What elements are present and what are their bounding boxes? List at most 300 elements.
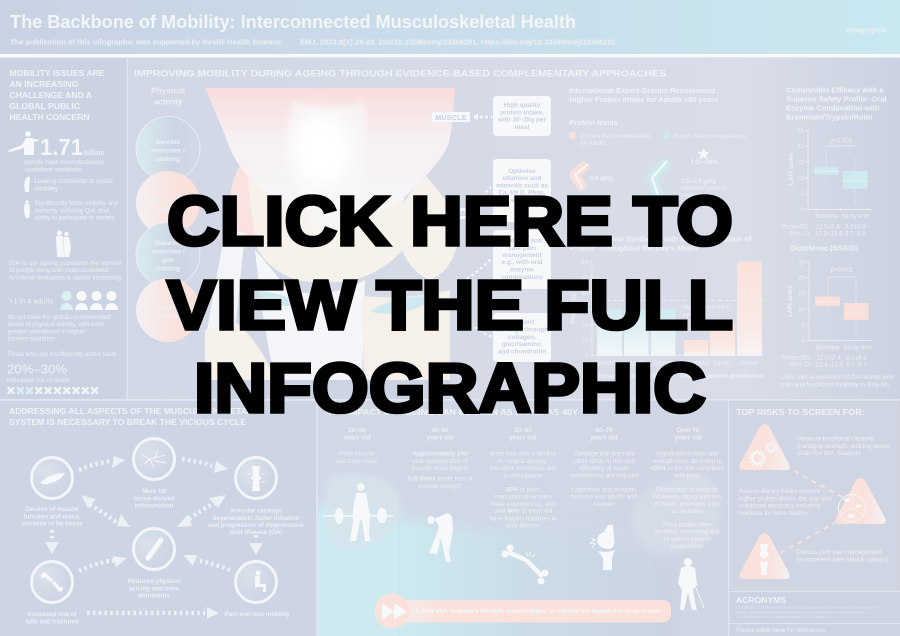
icon: wheelchair figure bbox=[24, 176, 30, 192]
column: over 70: <50% in the 80s compared bbox=[650, 465, 724, 472]
column: 40-50: years old bbox=[426, 434, 454, 442]
overlay: click here text: VIEW THE FULL bbox=[167, 266, 733, 344]
box plot: diclofenac: 8.7–9.7 bbox=[846, 362, 867, 368]
legend: expert: Expert Recommendations bbox=[674, 133, 745, 140]
node: fractures bbox=[32, 562, 72, 602]
bars: equal distribution bbox=[597, 309, 676, 356]
column: 40-50: muscle mass begins bbox=[412, 465, 468, 472]
box: protein: meal bbox=[515, 124, 530, 131]
column: 20-30 bbox=[323, 427, 393, 541]
label: muscle bbox=[432, 112, 478, 122]
label: current intake: 0.8 g/kg bbox=[590, 175, 613, 182]
circle: power bbox=[136, 278, 200, 342]
label: cartilage: joint disease (OA) bbox=[229, 529, 282, 536]
y axis labels: 50 bbox=[581, 274, 589, 282]
column: 20-30: and bone mass bbox=[336, 458, 378, 465]
circle: power: exercises bbox=[153, 314, 183, 320]
node: joint bbox=[236, 458, 276, 498]
column: over 70: years old bbox=[674, 434, 702, 442]
box plot: enzyme combination: Mean±SD bbox=[781, 224, 809, 230]
column: 60-70: mechanisms are reduced bbox=[569, 472, 639, 480]
box plot: enzyme combination: LAFI score bbox=[788, 152, 795, 185]
box: vitamins: Optimise bbox=[508, 168, 536, 175]
box: protein: with 20–35g per bbox=[497, 117, 546, 124]
text: limits mobility: ability to participate in society bbox=[34, 214, 116, 222]
text: physical activity levels: do not meet the global recommended bbox=[8, 314, 111, 321]
box plot: diclofenac bbox=[782, 259, 872, 368]
divider bbox=[730, 623, 900, 624]
box plot: diclofenac: 25 bbox=[798, 259, 806, 266]
text: ageing population: of people living with musculoskeletal bbox=[9, 267, 109, 274]
infographic tag: Infographic bbox=[846, 26, 887, 34]
box: pain management: enzyme bbox=[510, 266, 534, 274]
stat: 1.71 billion: billion bbox=[84, 150, 105, 157]
box: pain management: combinations bbox=[501, 274, 543, 281]
column: over 70: increases, along with risk bbox=[652, 494, 722, 501]
meniscus bbox=[257, 291, 291, 306]
box: pain management: e.g., with oral bbox=[502, 259, 543, 266]
box: vitamins: vitamins and bbox=[502, 175, 542, 182]
circle: aerobic bbox=[136, 116, 200, 180]
heading: physical activity: Physical bbox=[151, 86, 185, 96]
label: equal: Equal protein distribution bbox=[597, 373, 673, 380]
text: functional capacity: Measure functional capacity bbox=[797, 436, 875, 442]
label: expert intake: 1.0–1.2 g/kg bbox=[681, 178, 716, 185]
y axis labels: 30 bbox=[581, 306, 589, 314]
panel: nutrition and joint boxes bbox=[432, 96, 551, 362]
note: LAFI: pain and functional disability in daily life bbox=[781, 381, 890, 388]
icon: star increase: 25–50% bbox=[695, 159, 718, 166]
x axis labels: Breakfast bbox=[683, 360, 709, 367]
panel: protein synthesis bar chart bbox=[569, 234, 765, 380]
panel: mobility issues bbox=[0, 58, 128, 399]
medial tendon bbox=[255, 250, 310, 380]
text: limits mobility: dexterity reducing QoL and bbox=[34, 207, 109, 214]
node: muscle decline bbox=[32, 458, 72, 498]
box: pain management bbox=[493, 230, 551, 289]
y axis labels: 20 bbox=[581, 322, 589, 329]
column: over 70 bbox=[650, 427, 724, 610]
text: physical activity levels: income countries bbox=[8, 336, 55, 343]
axes bbox=[589, 262, 763, 356]
stat: 1.71 billion: 1.71 bbox=[40, 134, 83, 160]
box plot: enzyme combination: 12.3–12.9 bbox=[815, 230, 843, 238]
box plot: enzyme combination: 9.1±3.9 bbox=[845, 224, 866, 230]
label: reduced activity: Reduced physical bbox=[128, 578, 181, 585]
knee anatomy illustration bbox=[205, 88, 459, 380]
icon: plate triangle bbox=[835, 478, 886, 524]
label: muscle decline: Decline of muscle bbox=[26, 506, 79, 513]
heading: physical activity: activity bbox=[154, 96, 183, 106]
column: 50-60 bbox=[489, 427, 557, 584]
label: falls: Increased risk of bbox=[27, 611, 78, 618]
column: 40-50 bbox=[407, 427, 473, 562]
text: functional capacity: (handgrip strength, walking speed, bbox=[797, 443, 892, 450]
box: pain management: Effective and bbox=[502, 238, 542, 244]
femur cream bbox=[248, 175, 405, 282]
label: bone bbox=[444, 208, 469, 219]
box plot: enzyme combination: 95% CI bbox=[789, 230, 810, 238]
label: inflammation: tissue derived bbox=[133, 495, 175, 502]
text: ageing population: functional limitations is rapidly increasing bbox=[9, 274, 121, 281]
header band bbox=[0, 0, 900, 58]
icon: gears triangle bbox=[739, 424, 790, 470]
y axis labels: 40 bbox=[581, 290, 589, 298]
text: dietary intake: nutritional adequacy including bbox=[739, 503, 821, 510]
heading: mobility issues: HEALTH CONCERN bbox=[10, 112, 90, 122]
box: vitamins: and Mg bbox=[511, 197, 533, 204]
text: dietary intake: higher protein across the day and bbox=[739, 495, 831, 502]
column: 60-70: efficiency of repair bbox=[579, 465, 629, 472]
box plot: enzyme combination: 20 bbox=[797, 144, 805, 150]
label: cartilage: degeneration: faster initiation bbox=[213, 515, 300, 522]
heading: top risks: TOP RISKS TO SCREEN FOR: bbox=[736, 407, 865, 417]
icon: older couple bbox=[56, 230, 71, 257]
column: 60-70: Cartilage that lines the bbox=[573, 450, 635, 458]
panel: top risks bbox=[730, 401, 900, 636]
heading: improving mobility: IMPROVING MOBILITY DURING AGEING THROUGH EVIDENCE-BASED COMPLEMENTARY APPROACHES bbox=[134, 68, 666, 78]
lavender wave bbox=[318, 401, 496, 523]
panel: complementary approaches background bbox=[128, 58, 900, 399]
box plot: diclofenac: 0 bbox=[802, 338, 806, 345]
column: 50-60: prevalent in females due bbox=[489, 465, 557, 472]
box plot: enzyme combination: 8.7–9.6 bbox=[845, 230, 866, 238]
horizontal divider bbox=[0, 399, 900, 401]
icon: stretching person bbox=[7, 131, 40, 155]
column: over 70: as diabetes bbox=[671, 508, 703, 515]
legend: current bbox=[569, 132, 651, 147]
icon: four people bbox=[60, 291, 118, 310]
circle: resistance: training bbox=[156, 206, 180, 214]
label: reduced activity: activity and bone bbox=[129, 585, 180, 592]
heading: efficacy: Comparable Efficacy with a bbox=[786, 86, 884, 94]
box: protein: protein intake, bbox=[500, 109, 544, 116]
box: pain management: safe pain bbox=[508, 245, 536, 252]
box plot: enzyme combination: 5 bbox=[801, 191, 805, 198]
text: risk of death: increased risk of death bbox=[7, 377, 70, 384]
box: cartilage: and chondroitin bbox=[498, 348, 546, 356]
lateral muscle bbox=[230, 166, 255, 248]
circle: aerobic: Aerobic bbox=[156, 139, 181, 146]
right cream bone bbox=[402, 176, 456, 280]
label: muscle: MUSCLE bbox=[435, 115, 467, 122]
x axis labels: Lunch bbox=[714, 360, 731, 367]
text: acronyms list: QoL: quality of life; SD: standard deviation; Vit D: Vitamin D. bbox=[736, 615, 829, 619]
column: over 70: with peak bbox=[673, 472, 701, 480]
text: references: Please click here for references. bbox=[736, 627, 827, 634]
panel: physical activity circles bbox=[136, 116, 200, 342]
stat: 20-30 percent: 20%–30% bbox=[7, 362, 67, 376]
icon: person with cane bbox=[24, 200, 30, 218]
box plot: diclofenac: 5 bbox=[802, 322, 806, 329]
heading: protein recommendations: Higher Protein Intake for Adults >65 years bbox=[569, 95, 718, 104]
support statement: The publication of this infographic was supported by Nestlé Health Science. bbox=[10, 40, 283, 46]
column: over 70: Over 70 bbox=[677, 427, 700, 434]
heading: mobility issues: GLOBAL PUBLIC bbox=[10, 101, 80, 111]
quadriceps tendon bbox=[289, 100, 366, 233]
label: expert intake: intake for bbox=[681, 192, 706, 199]
box plot: diclofenac: LAFI score bbox=[787, 284, 794, 317]
quadriceps bbox=[205, 88, 455, 213]
box: pain management: management bbox=[502, 252, 543, 259]
text: dietary intake: nutrients for bone health) bbox=[739, 510, 808, 517]
icon: knee joint bbox=[590, 525, 615, 570]
label: unequal: Unequal protein distribution bbox=[681, 373, 764, 380]
box plot: diclofenac: 12.7±2.4 bbox=[816, 354, 841, 362]
heading: protein recommendations: International Expert Groups Recommend bbox=[569, 86, 716, 95]
column: 60-70: 60–70 bbox=[595, 427, 613, 434]
column: 40-50: Approximately 1%/ bbox=[412, 450, 468, 458]
y axis labels: 10 bbox=[581, 338, 589, 344]
box: vitamins: Ca, Vit D, Phos. bbox=[498, 190, 546, 196]
bars: unequal distribution bbox=[684, 262, 762, 356]
box plot: diclofenac: 10 bbox=[798, 306, 806, 313]
column: over 70: Food intake often bbox=[663, 522, 711, 528]
lower-right cream bone bbox=[362, 290, 450, 380]
icon: older person with cane bbox=[678, 558, 704, 610]
heading: efficacy: Bromelain/Trypsin/Rutin bbox=[786, 112, 873, 122]
column: 50-60: over 40% of them will bbox=[494, 508, 552, 515]
blob: lifter bbox=[325, 474, 401, 552]
box plot: diclofenac: 15 bbox=[798, 290, 806, 297]
box plot: diclofenac: p<0.001 bbox=[831, 266, 854, 274]
column: 50-60: to menopause bbox=[503, 472, 543, 480]
circle: balance: Balance bbox=[155, 240, 181, 247]
text: acronyms list: Ca: calcium; CI: confidence interval; LAFI: Lequesne Algofunctional Index; Mg: magnesium; bbox=[736, 606, 878, 610]
y axis labels: 60 bbox=[581, 259, 589, 266]
annotation: maximum synthesis: synthesis bbox=[683, 312, 709, 318]
dark band under knee bbox=[205, 380, 450, 399]
box: cartilage: collagen, bbox=[508, 334, 536, 341]
box plot: diclofenac: 95% CI bbox=[790, 362, 811, 368]
node: bone bbox=[134, 528, 174, 570]
box plot: diclofenac: 20 bbox=[798, 275, 806, 282]
box plot: diclofenac: Baseline bbox=[816, 344, 840, 352]
box plot: enzyme combination: 10 bbox=[797, 175, 805, 182]
box plot: enzyme combination: 12.6±2.4 bbox=[816, 224, 840, 230]
text: acronyms list: NSAID: non-steroidal anti-inflammatory drug; OA: osteoarthritis; Phos: Phosphorus; bbox=[736, 610, 865, 614]
column: 40-50: 40–50 bbox=[431, 427, 449, 434]
column: 50-60: Bone loss with a decline bbox=[490, 450, 557, 458]
column: over 70: malnutrition bbox=[671, 543, 704, 550]
box plot: enzyme combination: 0 bbox=[801, 206, 805, 214]
label: inflammation: More fat bbox=[142, 488, 166, 495]
column: 60-70: joints tends to thin and bbox=[572, 458, 636, 465]
circle: resistance bbox=[136, 171, 200, 235]
panel: efficacy box plots bbox=[781, 86, 894, 388]
box: cartilage: glucosamine, bbox=[502, 341, 543, 348]
label: bone: BONE bbox=[446, 211, 467, 218]
label: expert intake: minimum protein bbox=[681, 185, 727, 192]
label: muscle decline: function and mass; bbox=[24, 513, 80, 520]
heading: mobility issues: CHALLENGE AND A bbox=[10, 90, 92, 100]
divider bbox=[730, 591, 900, 592]
panel: right column divider bbox=[728, 401, 730, 636]
column: 60-70: become less elastic and bbox=[571, 494, 638, 501]
column: over 70: strength loss, declining to bbox=[652, 458, 722, 465]
column: 60-70: Ligaments and tendons bbox=[572, 486, 636, 494]
circle: balance bbox=[136, 222, 200, 286]
connectors bbox=[462, 117, 492, 337]
heading: vicious cycle: SYSTEM IS NECESSARY TO BREAK THE VICIOUS CYCLE bbox=[9, 417, 246, 427]
text: leading contributor: disability bbox=[34, 185, 59, 192]
column: 50-60: in mineral density; bbox=[498, 458, 548, 465]
icon: bent figure bbox=[427, 513, 453, 562]
column: over 70: declines, increasing risk bbox=[654, 529, 721, 536]
heading: mobility issues: AN INCREASING bbox=[10, 79, 79, 89]
heading: efficacy: Superior Safety Profile: Oral bbox=[786, 94, 886, 104]
heading: vicious cycle: ADDRESSING ALL ASPECTS OF THE MUSCULOSKELETAL bbox=[9, 406, 252, 416]
box plot: enzyme combination: 15 bbox=[797, 159, 805, 166]
legend: current: Current Recommendation bbox=[580, 133, 651, 140]
text: limits mobility: Significantly limits mobility and bbox=[34, 200, 119, 207]
column: 20-30: 20–30 bbox=[348, 427, 366, 434]
legend: current: for Adults bbox=[580, 140, 606, 147]
circle: balance: training bbox=[156, 266, 180, 272]
icon: joint triangle bbox=[739, 533, 790, 579]
label: falls: falls and fractures bbox=[25, 618, 79, 625]
callout: poor diet: A poor diet, sedentary lifestyle, comorbidities, or injuries will hasten this progression bbox=[415, 608, 660, 615]
heading: protein levels: Protein levels bbox=[569, 118, 618, 127]
panel: impact of ageing bbox=[318, 409, 724, 636]
text: leading contributor: Leading contributor to global bbox=[34, 178, 113, 185]
icon: broken bone bbox=[502, 544, 548, 584]
text: people affected: people have musculoskeletal bbox=[25, 159, 104, 166]
circle: power: Power bbox=[158, 305, 178, 312]
text: ageing population: Due to our ageing population the number bbox=[9, 260, 122, 267]
column: 50-60: years old bbox=[509, 434, 537, 442]
connectors bbox=[780, 471, 846, 553]
label: cartilage: Articular cartilage bbox=[230, 508, 283, 514]
overlay: click here text: CLICK HERE TO bbox=[167, 182, 733, 260]
column: over 70: of calorie-protein bbox=[664, 536, 711, 543]
box: protein: High quality bbox=[504, 102, 541, 109]
stat: 1.71 billion bbox=[40, 134, 105, 160]
column: 50-60: menopausal females bbox=[494, 494, 552, 501]
blob: right bbox=[632, 475, 720, 552]
text: physical activity levels: levels of physical activity, with even bbox=[8, 321, 105, 328]
label: reduced activity: detriments bbox=[138, 592, 170, 600]
column: 50-60: have fragility fractures in bbox=[489, 516, 557, 522]
column: 40-50: muscle strength bbox=[418, 483, 462, 490]
box: cartilage bbox=[493, 313, 551, 362]
label: cartilage: and progression of degenerative bbox=[208, 522, 305, 529]
panel: vicious cycle bbox=[0, 401, 318, 636]
box plot: enzyme combination: 25 bbox=[797, 128, 805, 135]
text: joint pain: (recommend safe natural options) bbox=[796, 556, 889, 563]
column: over 70: Percentage of body fat bbox=[656, 486, 718, 494]
text: insufficiently active: Those who are insufficiently active have bbox=[7, 351, 117, 358]
heading: impact of ageing: THE IMPACT OF AGEING CAN BE SEEN AS EARLY AS 40Y bbox=[327, 407, 578, 417]
circle: aerobic: exercises / bbox=[151, 148, 185, 154]
box: vitamins: minerals such as bbox=[496, 182, 548, 189]
circle: aerobic: walking bbox=[155, 156, 180, 163]
x axis labels: Lunch bbox=[628, 360, 645, 367]
box: cartilage: Support bbox=[510, 319, 535, 326]
heading: efficacy: Enzyme Combination with bbox=[786, 104, 880, 112]
circle: balance: gait bbox=[162, 257, 175, 264]
box: vitamins bbox=[493, 159, 551, 222]
column: over 70: Significant muscle and bbox=[656, 450, 719, 458]
column: 60-70: years old bbox=[590, 434, 618, 442]
x axis labels: Dinner bbox=[740, 360, 758, 367]
box plot: enzyme combination bbox=[781, 128, 871, 238]
column: over 70: of health problems such bbox=[654, 501, 720, 508]
box: cartilage: cartilage through bbox=[496, 326, 548, 334]
callout: poor diet bbox=[374, 594, 671, 628]
box plot: diclofenac: 9.1±4.2 bbox=[846, 354, 867, 362]
column: 50-60: their lifetime bbox=[506, 522, 540, 530]
column: 40-50: year average loss of bbox=[412, 458, 468, 465]
x axis labels: Breakfast bbox=[597, 360, 623, 367]
column: 20-30: years old bbox=[343, 434, 371, 442]
heading: protein synthesis: Protein Throughout the Day's Meals bbox=[570, 244, 698, 252]
y axis title: Protein (g) bbox=[570, 293, 577, 323]
heading: acronyms: ACRONYMS bbox=[736, 595, 786, 605]
overlay: click here text bbox=[167, 182, 733, 427]
citation: EMJ. 2023;8[2]:28-29. DOI/10.33590/emj/10306291. https://doi.org/10.33590/emj/10306291. bbox=[300, 40, 618, 46]
icon: star increase bbox=[692, 148, 718, 166]
annotation: maximum synthesis: Maximum protein bbox=[683, 304, 731, 311]
text: functional capacity: chair rise test, balance) bbox=[797, 450, 861, 457]
text: dietary intake: Assess dietary intake (ensure bbox=[739, 488, 821, 495]
lower-left cream bone bbox=[205, 322, 275, 380]
label: inflammation: inflammation bbox=[135, 502, 173, 510]
icon: row of crosses bbox=[8, 388, 97, 393]
overlay: click here text: INFOGRAPHIC bbox=[194, 349, 706, 427]
x axis labels: Dinner bbox=[654, 360, 672, 367]
text: joint pain: Discuss joint pain management bbox=[796, 549, 882, 556]
note: LAFI: LAFI: self-assessment of OA-related joint bbox=[781, 374, 894, 381]
dashed guide lines bbox=[592, 300, 765, 325]
heading: protein synthesis: Greater Protein Synthesis with Even Distribution of bbox=[569, 234, 752, 244]
y axis labels: 0 bbox=[585, 353, 589, 360]
box plot: enzyme combination: p<0.001 bbox=[830, 138, 853, 144]
circle: balance: exercises / bbox=[151, 248, 185, 256]
column: 50-60: 30% of post- bbox=[506, 486, 540, 494]
icon: weightlifter bbox=[323, 483, 393, 541]
stat: 1 in 4 adults: >1 in 4 adults bbox=[9, 296, 53, 306]
box plot: enzyme combination: Study end bbox=[841, 213, 869, 220]
heading: mobility issues: MOBILITY ISSUES ARE bbox=[10, 68, 105, 78]
circle: resistance: Resistance bbox=[151, 198, 186, 205]
box plot: diclofenac: Mean±SD bbox=[782, 354, 810, 362]
node: inflammation bbox=[134, 438, 174, 480]
text: people affected: conditions worldwide bbox=[25, 166, 83, 173]
column: 40-50: 2–5 times faster loss of bbox=[407, 476, 473, 482]
column: 50-60: have osteoporosis, and bbox=[491, 501, 556, 508]
lower-center white bbox=[207, 230, 245, 330]
panel: protein recommendations bbox=[569, 86, 745, 206]
column: 60-70: weaken bbox=[592, 501, 615, 508]
icon: knee expert bbox=[652, 160, 668, 205]
column: 60-70 bbox=[569, 427, 639, 570]
column: 20-30: Peak muscle bbox=[339, 450, 375, 458]
text: physical activity levels: greater prevalence in higher bbox=[8, 328, 85, 335]
box: protein bbox=[493, 96, 551, 136]
box plot: diclofenac: 12.4–13.0 bbox=[816, 362, 844, 368]
label: pain: Pain and less mobility bbox=[224, 611, 290, 618]
box plot: enzyme combination: Baseline bbox=[815, 213, 839, 220]
icon: knee current bbox=[574, 164, 588, 189]
node: pain bbox=[236, 562, 276, 602]
column: 50-60: 50–60 bbox=[514, 427, 532, 434]
arrows bbox=[45, 456, 263, 619]
label: muscle decline: increase of fat tissue bbox=[21, 520, 83, 528]
box plot: diclofenac: Study end bbox=[843, 344, 871, 352]
title: The Backbone of Mobility: Interconnected Musculoskeletal Health bbox=[10, 11, 576, 32]
label: expert intake: healthy adults bbox=[681, 199, 719, 206]
